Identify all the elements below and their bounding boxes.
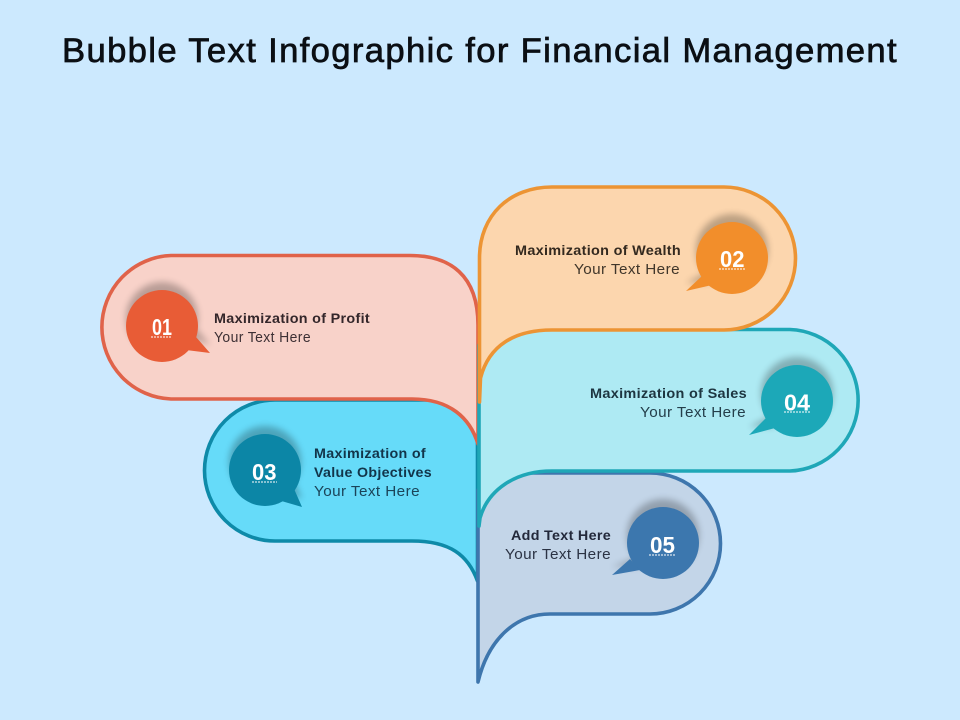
icon: bubble 02: 02 bbox=[720, 246, 744, 272]
icon: bubble 05 bbox=[612, 499, 699, 579]
text: 04: Your Text Here bbox=[640, 405, 746, 421]
text: 01: Maximization of Profit bbox=[214, 310, 370, 326]
text: 03: Your Text Here bbox=[314, 484, 420, 500]
panel: 01 profit bbox=[102, 256, 478, 444]
panel: 04 sales bbox=[479, 330, 858, 526]
icon: bubble 04 bbox=[749, 357, 833, 437]
text: 05: Your Text Here bbox=[505, 547, 611, 563]
icon: bubble 01 bbox=[126, 282, 210, 362]
text: 03: Value Objectives bbox=[314, 464, 432, 480]
panel: 03 value objectives bbox=[204, 400, 478, 581]
icon: bubble 01: 01 bbox=[152, 314, 172, 340]
text: 02: Maximization of Wealth bbox=[515, 242, 681, 258]
text: 05 bbox=[505, 527, 611, 563]
text: 01: Your Text Here bbox=[214, 330, 311, 346]
text: 04: Maximization of Sales bbox=[590, 385, 747, 401]
text: 05: Add Text Here bbox=[511, 527, 611, 543]
text: 04 bbox=[590, 385, 747, 421]
icon: bubble 04: 04 bbox=[784, 390, 810, 416]
icon: bubble 05: 05 bbox=[650, 532, 675, 558]
text: 03: Maximization of bbox=[314, 445, 426, 461]
title: Bubble Text Infographic for Financial Management bbox=[62, 32, 898, 70]
icon: bubble 03 bbox=[229, 426, 302, 507]
panel: 02 wealth bbox=[480, 187, 795, 402]
icon: bubble 03: 03 bbox=[252, 459, 276, 485]
panel: 05 add text bbox=[478, 473, 720, 682]
text: 01 bbox=[214, 310, 370, 346]
text: 03 bbox=[314, 445, 432, 500]
text: 02: Your Text Here bbox=[574, 262, 680, 278]
text: 02 bbox=[515, 242, 681, 278]
icon: bubble 02 bbox=[686, 214, 768, 294]
